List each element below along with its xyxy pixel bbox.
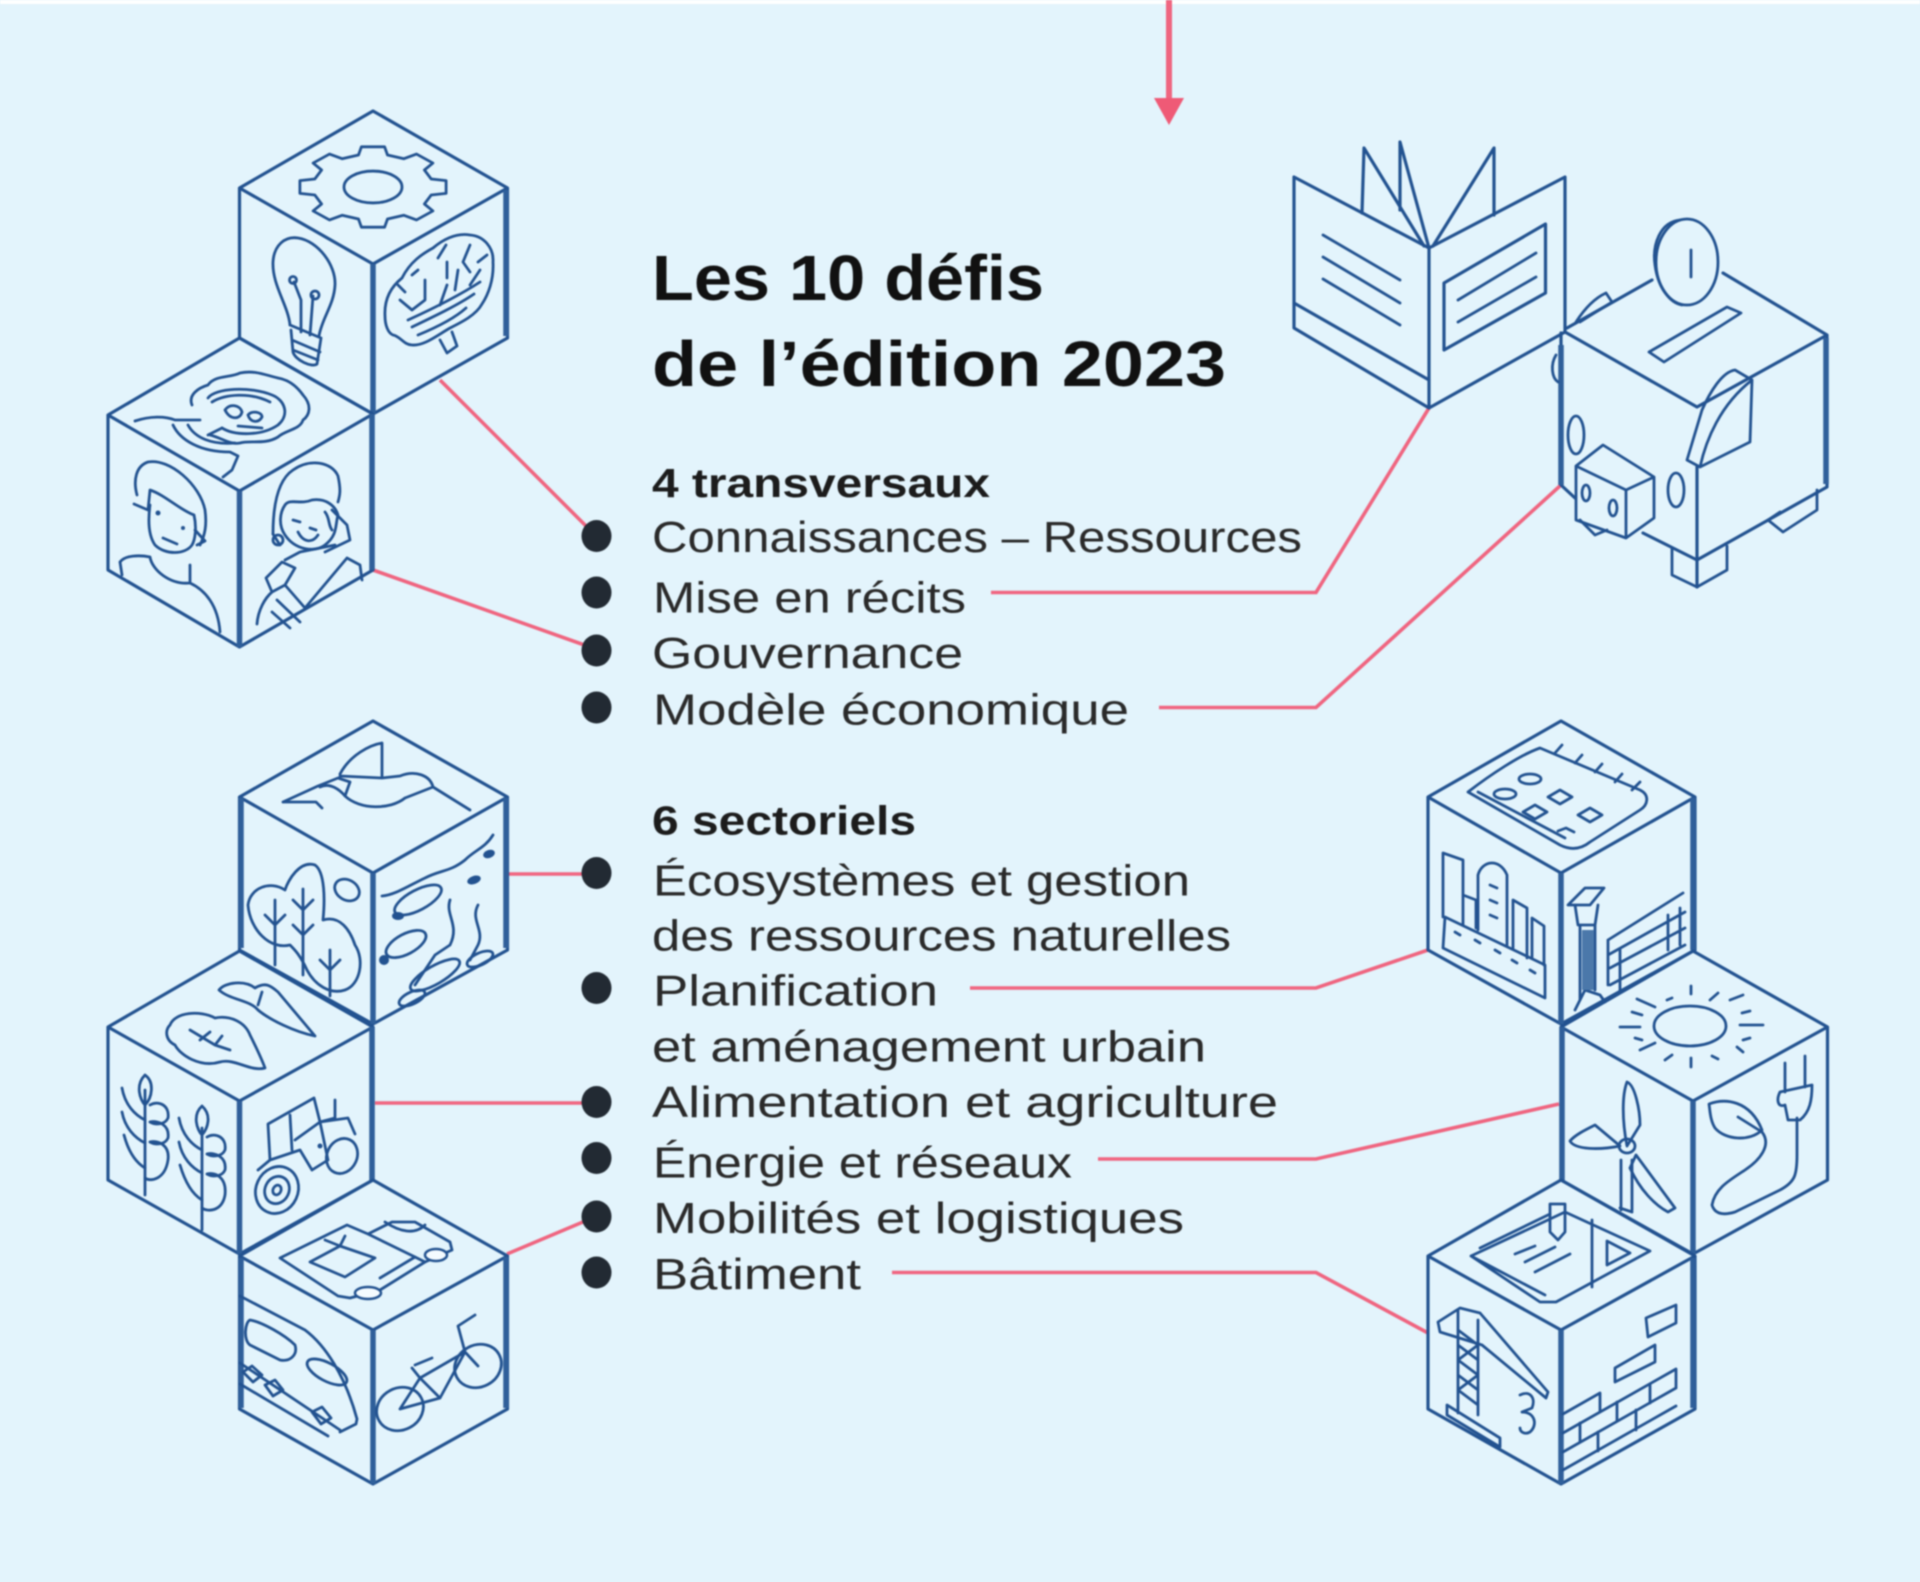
ears bbox=[1687, 370, 1752, 467]
text block: 6 sectoriels: Énergie et réseaux bbox=[653, 1138, 1072, 1188]
text block: 4 transversaux: Gouvernance bbox=[652, 629, 963, 678]
text block: 6 sectoriels: Alimentation et agriculture bbox=[652, 1078, 1278, 1127]
text block: 6 sectoriels: Mobilités et logistiques bbox=[653, 1194, 1184, 1243]
cube: building bbox=[1428, 1180, 1695, 1484]
cube: mobility bbox=[240, 1180, 509, 1484]
title bbox=[652, 242, 1226, 400]
icon: blueprint bbox=[1471, 1204, 1650, 1302]
icon: street lamp and bench bbox=[1568, 888, 1685, 1010]
feet bbox=[1672, 546, 1727, 587]
cube: food and agriculture bbox=[108, 951, 373, 1254]
icon: bicycle bbox=[369, 1315, 509, 1439]
text block: 4 transversaux: Connaissances – Ressources bbox=[652, 513, 1302, 562]
icon: gear bbox=[300, 147, 446, 227]
icon: brick wall bbox=[1563, 1305, 1676, 1470]
text block: 6 sectoriels: Écosystèmes et gestion bbox=[653, 856, 1190, 906]
icon: calendar plan bbox=[1468, 745, 1647, 848]
icon: salad leaf and carrot bbox=[167, 983, 315, 1069]
icon: brain bbox=[385, 235, 493, 353]
connector lines bbox=[373, 380, 1561, 1333]
arrow: down from previous section bbox=[1154, 0, 1184, 125]
icon: river bed and leaves bbox=[379, 835, 496, 1009]
icon: sun bbox=[1620, 986, 1763, 1067]
icon: landscape with peak bbox=[283, 743, 470, 810]
cube: ecosystems bbox=[240, 721, 508, 1024]
icon: open book bbox=[1294, 142, 1565, 408]
icon: crane bbox=[1438, 1308, 1548, 1447]
cube: urban planning bbox=[1428, 721, 1695, 1024]
text block: 4 transversaux: Mise en récits bbox=[653, 574, 966, 622]
icon: man portrait bbox=[120, 462, 220, 632]
text block: 6 sectoriels: Bâtiment bbox=[653, 1250, 861, 1299]
text block: 4 transversaux bbox=[652, 460, 1302, 734]
icon: woman portrait bbox=[257, 463, 362, 628]
title: de l’édition 2023 bbox=[652, 328, 1226, 400]
cube: people bbox=[108, 338, 373, 647]
text block: 6 sectoriels: Planification bbox=[653, 966, 938, 1016]
icon: high-speed train bbox=[240, 1296, 357, 1436]
cube: gear, bulb, brain bbox=[240, 111, 508, 414]
icon: piggy bank bbox=[1552, 219, 1827, 587]
bullets: 6 sectoriels bbox=[582, 857, 612, 1288]
coin bbox=[1656, 219, 1718, 305]
icon: leaf and plug bbox=[1709, 1056, 1812, 1214]
icon: tractor bbox=[248, 1098, 363, 1221]
text block: 6 sectoriels: des ressources naturelles bbox=[652, 912, 1231, 960]
snout bbox=[1576, 445, 1654, 538]
title: Les 10 défis bbox=[652, 242, 1044, 314]
bullets: 4 transversaux bbox=[582, 520, 612, 724]
slot bbox=[1649, 307, 1741, 362]
icon: wind turbine bbox=[1570, 1082, 1675, 1212]
icon: city skyline bbox=[1443, 853, 1545, 998]
cube: energy bbox=[1561, 951, 1828, 1254]
text block: 4 transversaux: Modèle économique bbox=[653, 686, 1129, 734]
icon: delivery van bbox=[280, 1222, 452, 1299]
text block: 6 sectoriels: 6 sectoriels bbox=[652, 798, 916, 844]
text block: 6 sectoriels: et aménagement urbain bbox=[652, 1022, 1206, 1072]
icon: trees bbox=[248, 864, 363, 996]
icon: wheat ears bbox=[122, 1075, 225, 1230]
text block: 6 sectoriels bbox=[652, 798, 1278, 1299]
text block: 4 transversaux: 4 transversaux bbox=[652, 460, 990, 506]
icon: light bulb bbox=[273, 238, 335, 365]
icon: person with curly hair bbox=[135, 372, 309, 477]
